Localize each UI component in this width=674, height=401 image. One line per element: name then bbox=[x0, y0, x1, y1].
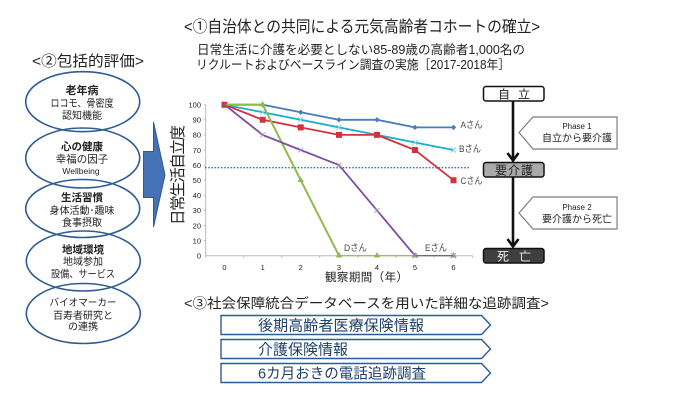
status: independent: 自立 bbox=[498, 88, 530, 102]
y-axis labels: 10 bbox=[193, 236, 201, 245]
text block: cohort description bbox=[196, 42, 525, 72]
ellipse: lifestyle: 食事摂取 bbox=[62, 216, 102, 229]
banner: long-term care insurance: 介護保険情報 bbox=[258, 342, 348, 358]
ellipse: mental health: Wellbeing bbox=[62, 166, 100, 176]
status: independent bbox=[484, 86, 544, 102]
arrow: assessment to chart bbox=[144, 122, 165, 227]
title: cohort establishment: <①自治体との共同による元気高齢者コホートの確立> bbox=[184, 18, 540, 36]
y-axis labels: 90 bbox=[193, 116, 201, 124]
y-axis labels: 0 bbox=[197, 252, 201, 260]
threshold line bbox=[205, 167, 469, 169]
ellipse: biomarkers bbox=[26, 284, 140, 344]
ellipse: lifestyle: 生活習慣 bbox=[61, 191, 103, 204]
series A bbox=[224, 102, 456, 130]
x-axis labels: 0 bbox=[222, 263, 227, 272]
callout: phase 2: 要介護から死亡 bbox=[542, 212, 612, 226]
callout: phase 1 bbox=[519, 117, 617, 149]
heading: social security database: <③社会保障統合データベースを用いた詳細な追跡調査> bbox=[184, 295, 549, 311]
ellipse: mental health: 心の健康 bbox=[61, 140, 103, 153]
callout: phase 1: 自立から要介護 bbox=[542, 132, 612, 144]
y-axis labels bbox=[188, 100, 201, 260]
ellipse: geriatric disease: 老年病 bbox=[66, 83, 98, 97]
ellipse: geriatric disease bbox=[26, 72, 140, 132]
y-axis labels: 40 bbox=[193, 191, 201, 200]
series labels: Aさん bbox=[460, 120, 482, 131]
y-axis labels: 20 bbox=[193, 221, 201, 230]
x-axis title: 観察期間（年） bbox=[325, 270, 408, 284]
arrow: independent to care bbox=[508, 100, 518, 160]
ellipse: mental health: 幸福の因子 bbox=[56, 152, 109, 166]
status: care needed bbox=[484, 162, 544, 178]
series D bbox=[224, 101, 457, 258]
status: death: 死亡 bbox=[497, 250, 531, 264]
panel: assessment ellipses bbox=[26, 72, 140, 343]
ellipse: geriatric disease: ロコモ、骨密度 bbox=[50, 96, 114, 110]
callout: phase 2 bbox=[519, 197, 617, 229]
panel: status flow bbox=[484, 86, 544, 264]
ellipse: lifestyle bbox=[26, 180, 140, 238]
banner: long-term care insurance bbox=[221, 340, 490, 358]
banner: late-stage elderly medical insurance bbox=[221, 316, 490, 334]
series E bbox=[224, 105, 456, 258]
y-axis labels: 80 bbox=[193, 131, 201, 140]
status: care needed: 要介護 bbox=[495, 162, 533, 178]
x-axis labels: 1 bbox=[261, 263, 265, 272]
ellipse: biomarkers: の連携 bbox=[68, 320, 98, 333]
ellipse: mental health bbox=[26, 128, 140, 188]
series labels bbox=[344, 120, 482, 254]
y-axis labels: 60 bbox=[193, 161, 201, 170]
x-axis labels: 2 bbox=[299, 263, 303, 272]
x-axis labels bbox=[222, 263, 456, 272]
text block: cohort description: 日常生活に介護を必要としない85-89歳の高齢者1,000名の bbox=[197, 42, 525, 57]
ellipse: geriatric disease: 認知機能 bbox=[62, 109, 102, 122]
series labels: Dさん bbox=[344, 243, 367, 254]
series B bbox=[224, 105, 456, 152]
ellipse: community environment bbox=[26, 231, 140, 291]
series C bbox=[222, 102, 456, 183]
callout: phase 1: Phase 1 bbox=[562, 122, 592, 131]
banner: phone follow-up bbox=[221, 364, 490, 382]
x-axis labels: 6 bbox=[451, 263, 456, 272]
ellipse: community environment: 設備、サービス bbox=[51, 268, 115, 280]
banner: late-stage elderly medical insurance: 後期高齢者医療保険情報 bbox=[258, 318, 424, 334]
x-axis labels: 4 bbox=[375, 263, 379, 272]
callout: phase 2: Phase 2 bbox=[562, 203, 592, 212]
x-axis labels: 3 bbox=[337, 263, 341, 272]
y-axis labels: 70 bbox=[193, 146, 201, 155]
x-axis labels: 5 bbox=[413, 263, 417, 272]
y-axis labels: 30 bbox=[193, 206, 201, 215]
ellipse: biomarkers: 百寿者研究と bbox=[53, 309, 113, 322]
heading: comprehensive assessment: <②包括的評価> bbox=[32, 53, 144, 70]
series labels: Eさん bbox=[425, 243, 447, 254]
status: death bbox=[484, 248, 544, 264]
arrow: care to death bbox=[508, 177, 518, 246]
line chart: daily living independence bbox=[188, 100, 482, 272]
text block: cohort description: リクルートおよびベースライン調査の実施［2017-2018年］ bbox=[196, 57, 510, 72]
y-axis labels: 50 bbox=[193, 176, 201, 185]
series labels: Cさん bbox=[460, 176, 482, 187]
ellipse: community environment: 地域参加 bbox=[63, 255, 103, 268]
banner: phone follow-up: 6カ月おきの電話追跡調査 bbox=[258, 366, 426, 382]
ellipse: community environment: 地域環境 bbox=[62, 243, 104, 256]
y-axis labels: 100 bbox=[188, 100, 201, 110]
ellipse: biomarkers: バイオマーカー bbox=[50, 297, 116, 309]
axes bbox=[204, 105, 473, 258]
ellipse: lifestyle: 身体活動･趣味 bbox=[50, 204, 114, 217]
y-axis title: 日常生活自立度 bbox=[169, 125, 187, 225]
series labels: Bさん bbox=[459, 144, 481, 155]
